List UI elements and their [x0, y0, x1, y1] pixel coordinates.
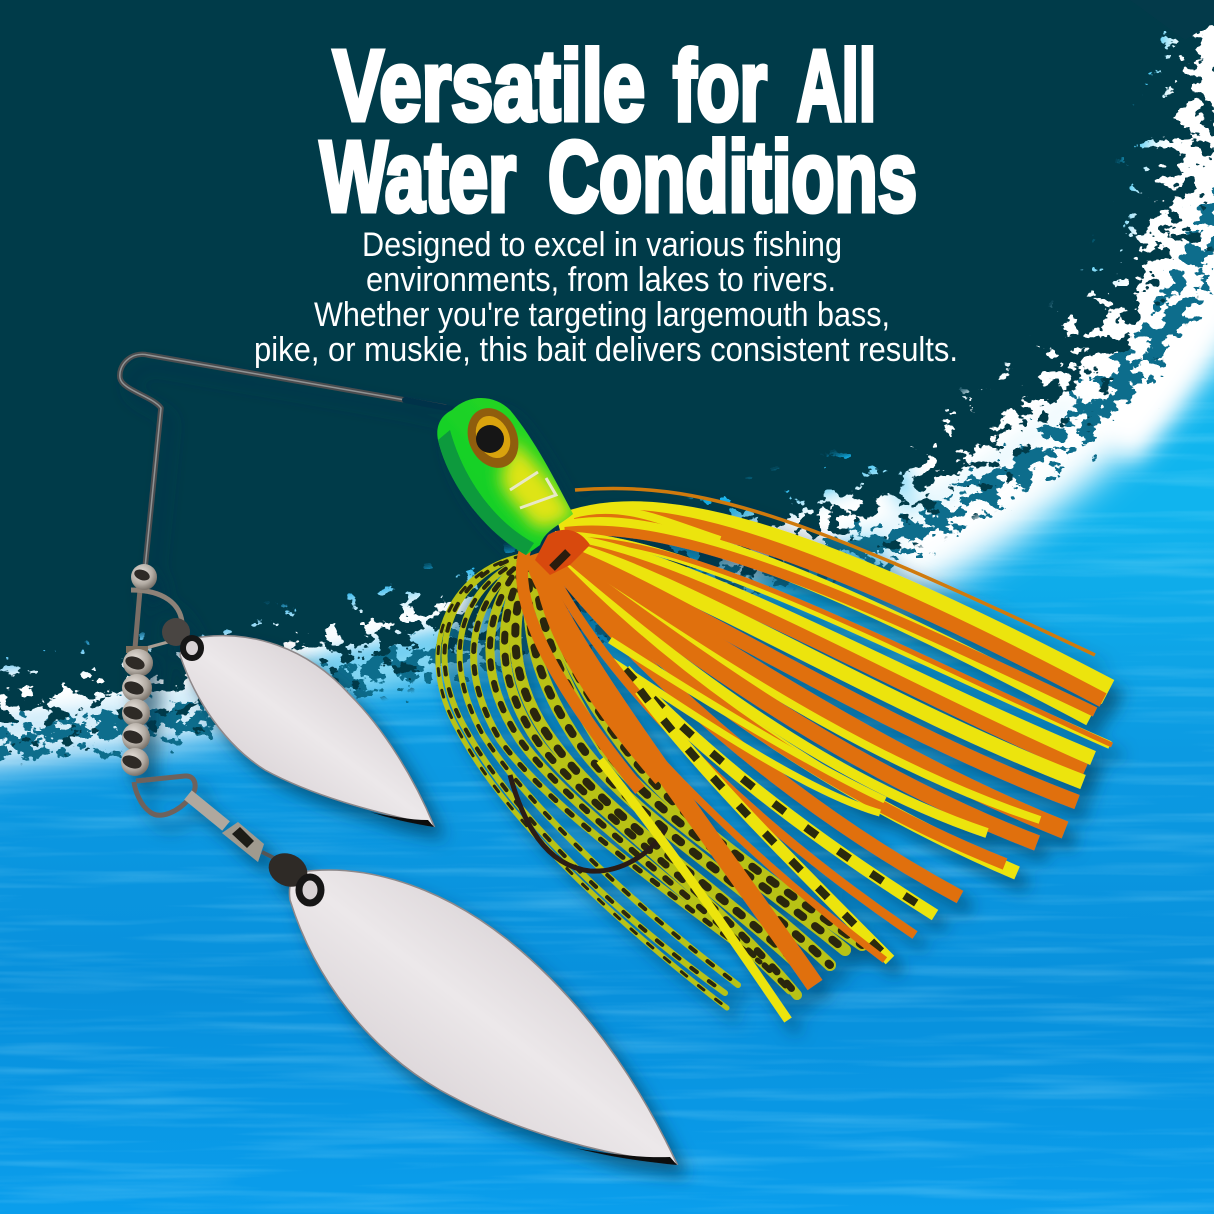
body text: Designed to excel in various fishing [362, 226, 842, 264]
background: foam glow band [0, 0, 1214, 748]
background: dark teal sky with splattered edge [0, 0, 1214, 718]
jig head [437, 398, 575, 555]
spotted skirt strands [438, 556, 862, 1008]
orange and yellow skirt strands [522, 488, 1112, 1020]
body text: environments, from lakes to rivers. [366, 261, 836, 299]
hook [510, 775, 665, 871]
title: Conditions [548, 121, 917, 233]
body text [254, 226, 958, 369]
title: All [797, 30, 876, 142]
upper blade [180, 636, 434, 827]
title [320, 30, 917, 233]
title: for [673, 30, 767, 142]
lower blade [289, 870, 677, 1165]
title: Water [320, 121, 516, 233]
title: Versatile [333, 30, 645, 142]
beads and swivel hardware [121, 564, 321, 903]
body text: Whether you're targeting largemouth bass, [314, 296, 890, 334]
wire arm [120, 354, 452, 648]
background: dark top-right corner [1130, 0, 1214, 40]
body text: pike, or muskie, this bait delivers consistent results. [254, 331, 958, 369]
spinnerbait lure [120, 354, 1112, 1165]
background: teal flecks on the water edge [0, 150, 1214, 752]
